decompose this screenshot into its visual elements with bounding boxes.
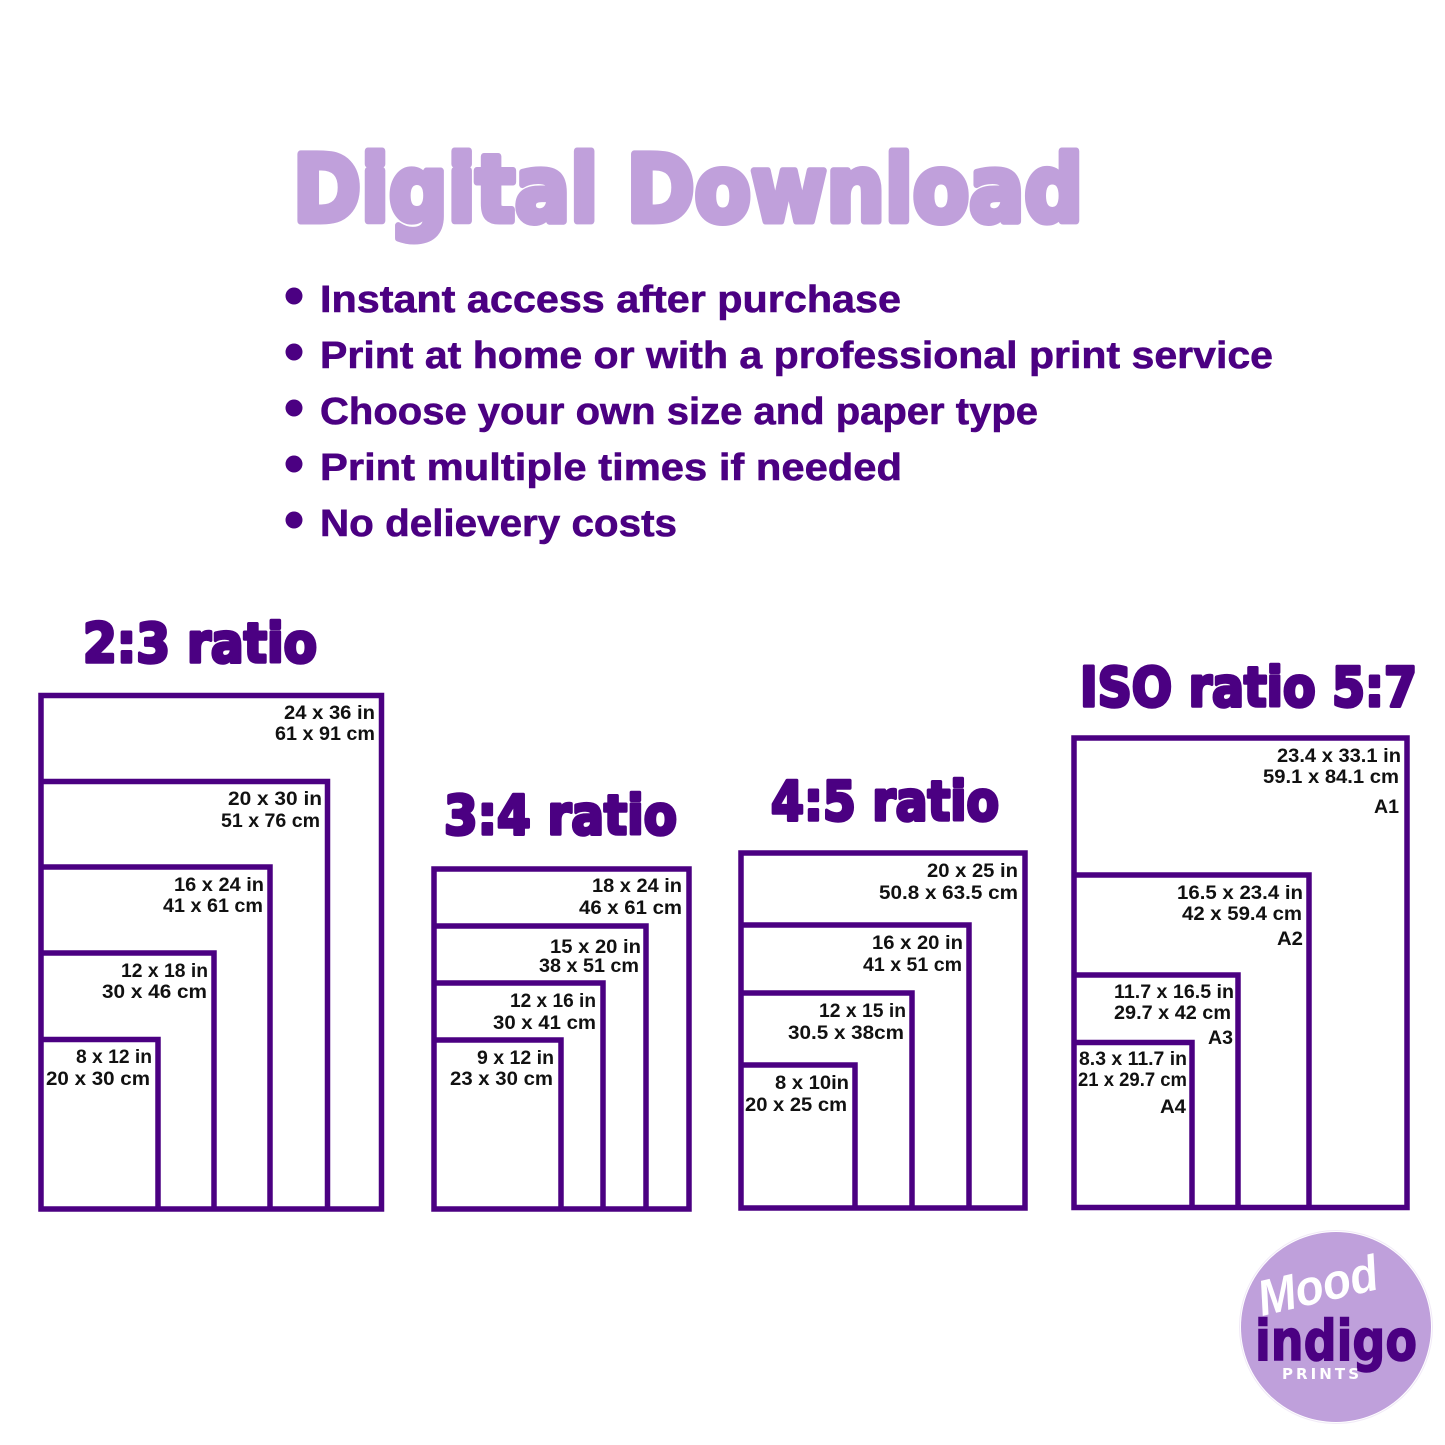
heading: 2:3 ratio: 2:3 ratio (83, 612, 317, 675)
label: A1 (1263, 746, 1401, 818)
panel: 3:4 ratio size diagram (434, 869, 689, 1209)
panel: 4:5 ratio size diagram (741, 853, 1025, 1208)
label: 18 x 24: 18 x 24 in (592, 876, 682, 897)
label: 12 x 15 (788, 1001, 906, 1044)
label: 15 x 20 (539, 937, 641, 977)
label: 12 x 18: 30 x 46 cm (102, 982, 207, 1003)
panel: 2:3 ratio size diagram (41, 696, 382, 1209)
label: A3: 29.7 x 42 cm (1114, 1003, 1231, 1024)
label: A4 (1078, 1049, 1187, 1118)
label: 24 x 36: 61 x 91 cm (275, 724, 375, 745)
logo: Mood Indigo Prints (1240, 1230, 1432, 1424)
label: A2: A2 (1277, 929, 1303, 950)
label: 9 x 12 (450, 1048, 554, 1090)
label: 20 x 25: 20 x 25 in (927, 861, 1018, 882)
label: A4: 21 x 29.7 cm (1078, 1070, 1187, 1091)
label: 16 x 20 (863, 933, 963, 976)
label: A4: A4 (1160, 1097, 1186, 1118)
bullet: choose size: Choose your own size and paper type (320, 391, 1038, 433)
label: 16 x 24: 16 x 24 in (174, 875, 264, 896)
label: A1: 59.1 x 84.1 cm (1263, 767, 1399, 788)
label: 16 x 20: 16 x 20 in (872, 933, 963, 954)
bullet: no delivery costs: No delievery costs (320, 503, 677, 545)
label: 12 x 16: 30 x 41 cm (493, 1013, 596, 1034)
bullet: instant access: Instant access after purchase (320, 279, 901, 321)
label: 20 x 30 (221, 789, 322, 832)
label: 15 x 20: 15 x 20 in (550, 937, 641, 958)
logo: Mood Indigo Prints: Mood (1252, 1244, 1385, 1327)
label: A3 (1114, 982, 1234, 1049)
label: 18 x 24 (579, 876, 682, 919)
label: A4: 8.3 x 11.7 in (1079, 1049, 1187, 1070)
label: A3: 11.7 x 16.5 in (1114, 982, 1234, 1003)
heading: 3:4 ratio: 3:4 ratio (444, 784, 677, 847)
label: 8 x 12: 20 x 30 cm (46, 1069, 150, 1090)
label: 12 x 18 (102, 961, 208, 1003)
label: 20 x 25 (879, 861, 1018, 904)
label: 9 x 12: 23 x 30 cm (450, 1069, 553, 1090)
panel: ISO ratio size diagram (1074, 738, 1407, 1208)
bullet: print multiple times: Print multiple times if needed (320, 447, 902, 489)
label: 15 x 20: 38 x 51 cm (539, 956, 639, 977)
label: A1: 23.4 x 33.1 in (1277, 746, 1401, 767)
label: 16 x 24 (163, 875, 264, 917)
label: 8 x 12 (46, 1047, 152, 1090)
label: 8 x 10: 8 x 10in (775, 1073, 849, 1094)
label: A2: 42 x 59.4 cm (1182, 904, 1302, 925)
label: 8 x 10 (745, 1073, 849, 1116)
label: A1: A1 (1374, 797, 1399, 818)
label: 18 x 24: 46 x 61 cm (579, 898, 682, 919)
label: A2: 16.5 x 23.4 in (1177, 883, 1303, 904)
label: 9 x 12: 9 x 12 in (477, 1048, 554, 1069)
label: 12 x 16 (493, 991, 596, 1034)
label: 20 x 30: 20 x 30 in (228, 789, 322, 810)
label: A3: A3 (1208, 1028, 1233, 1049)
label: 20 x 25: 50.8 x 63.5 cm (879, 883, 1018, 904)
label: 12 x 15: 30.5 x 38cm (788, 1023, 904, 1044)
label: 24 x 36: 24 x 36 in (284, 703, 375, 724)
label: 8 x 10: 20 x 25 cm (745, 1095, 847, 1116)
label: 20 x 30: 51 x 76 cm (221, 811, 320, 832)
title: Digital Download (293, 136, 1083, 243)
label: 8 x 12: 8 x 12 in (76, 1047, 152, 1068)
label: 16 x 24: 41 x 61 cm (163, 896, 263, 917)
label: 16 x 20: 41 x 51 cm (863, 955, 962, 976)
heading: 4:5 ratio: 4:5 ratio (771, 770, 999, 833)
label: 12 x 16: 12 x 16 in (510, 991, 596, 1012)
label: 24 x 36 (275, 703, 375, 745)
bullet list (286, 279, 1273, 545)
logo: Mood Indigo Prints: PRINTS (1282, 1365, 1359, 1383)
label: A2 (1177, 883, 1303, 950)
bullet: print at home: Print at home or with a professional print service (320, 335, 1273, 377)
label: 12 x 18: 12 x 18 in (121, 961, 208, 982)
label: 12 x 15: 12 x 15 in (819, 1001, 906, 1022)
